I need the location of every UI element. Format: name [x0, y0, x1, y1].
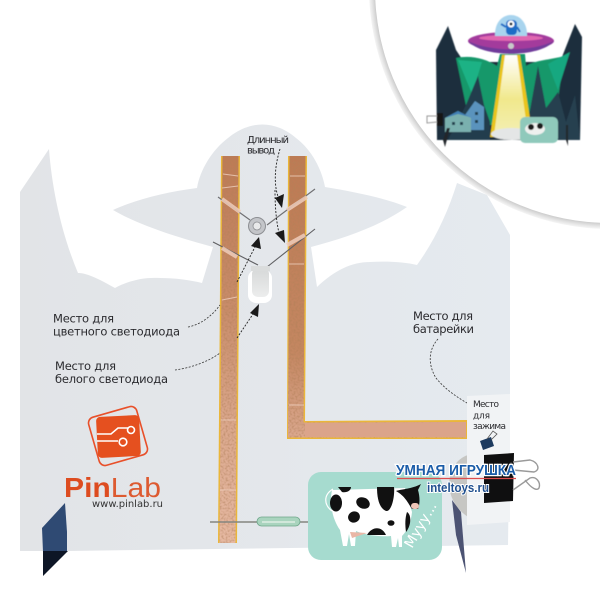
card: ufo-shaped circuit board [20, 124, 510, 551]
label: place for white LED: Место для [55, 359, 116, 373]
houses [445, 101, 484, 132]
card text: Мууу... [402, 499, 441, 551]
strip text: для [473, 412, 490, 422]
label: place for battery: Место для [413, 309, 473, 323]
watermark: site: inteltoys.ru [427, 480, 489, 495]
stand tabs [443, 128, 450, 147]
label: place for colored LED: цветного светодиода [53, 324, 180, 338]
tiny clip [427, 113, 443, 126]
flap: blue stand on left [42, 503, 68, 576]
inset: ufo scene [427, 15, 582, 147]
label: place for colored LED: Место для [53, 312, 114, 326]
pin stand on right [452, 500, 466, 573]
arrow: to colored LED [237, 237, 261, 282]
label: long lead: Длинный [247, 135, 289, 146]
colored LED with leads [218, 189, 315, 234]
reed switch [210, 517, 309, 526]
watermark: store name [396, 462, 516, 495]
callout line: battery [430, 339, 467, 403]
alien [501, 20, 520, 35]
icon: small binder clip [480, 431, 497, 450]
gray battery disc behind clip [449, 455, 468, 517]
copper strip: right with horizontal branch [287, 156, 467, 439]
dark forest backdrop [436, 24, 582, 140]
tiny cow card [520, 117, 558, 143]
callout line: white LED [175, 353, 220, 370]
green hills [456, 54, 564, 125]
dome [495, 15, 527, 36]
label: long lead: вывод [247, 146, 275, 156]
inset circle with shadow [369, 0, 600, 229]
watermark: store name: УМНАЯ ИГРУШКА [396, 462, 516, 479]
cow card [308, 472, 442, 560]
copper strip: left [218, 156, 240, 543]
logo: PinLab icon [87, 405, 149, 467]
arrow: long lead pointers [275, 149, 285, 243]
clip label strip [467, 394, 510, 525]
strip text: Место [473, 400, 499, 410]
cow [326, 484, 421, 547]
label: place for white LED: белого светодиода [55, 372, 168, 386]
arrow: to white LED [237, 304, 259, 338]
light beam [490, 55, 533, 137]
label: place for battery: батарейки [413, 322, 474, 336]
logo wordmark: PinLab: PinLab [64, 472, 161, 503]
callout line: colored LED [188, 305, 220, 327]
binder clip [484, 453, 539, 503]
saucer [468, 32, 554, 50]
dark trees [522, 66, 580, 140]
logo url: www.pinlab.ru [92, 499, 163, 510]
white LED with leads [213, 229, 315, 303]
strip text: зажима [473, 422, 506, 432]
